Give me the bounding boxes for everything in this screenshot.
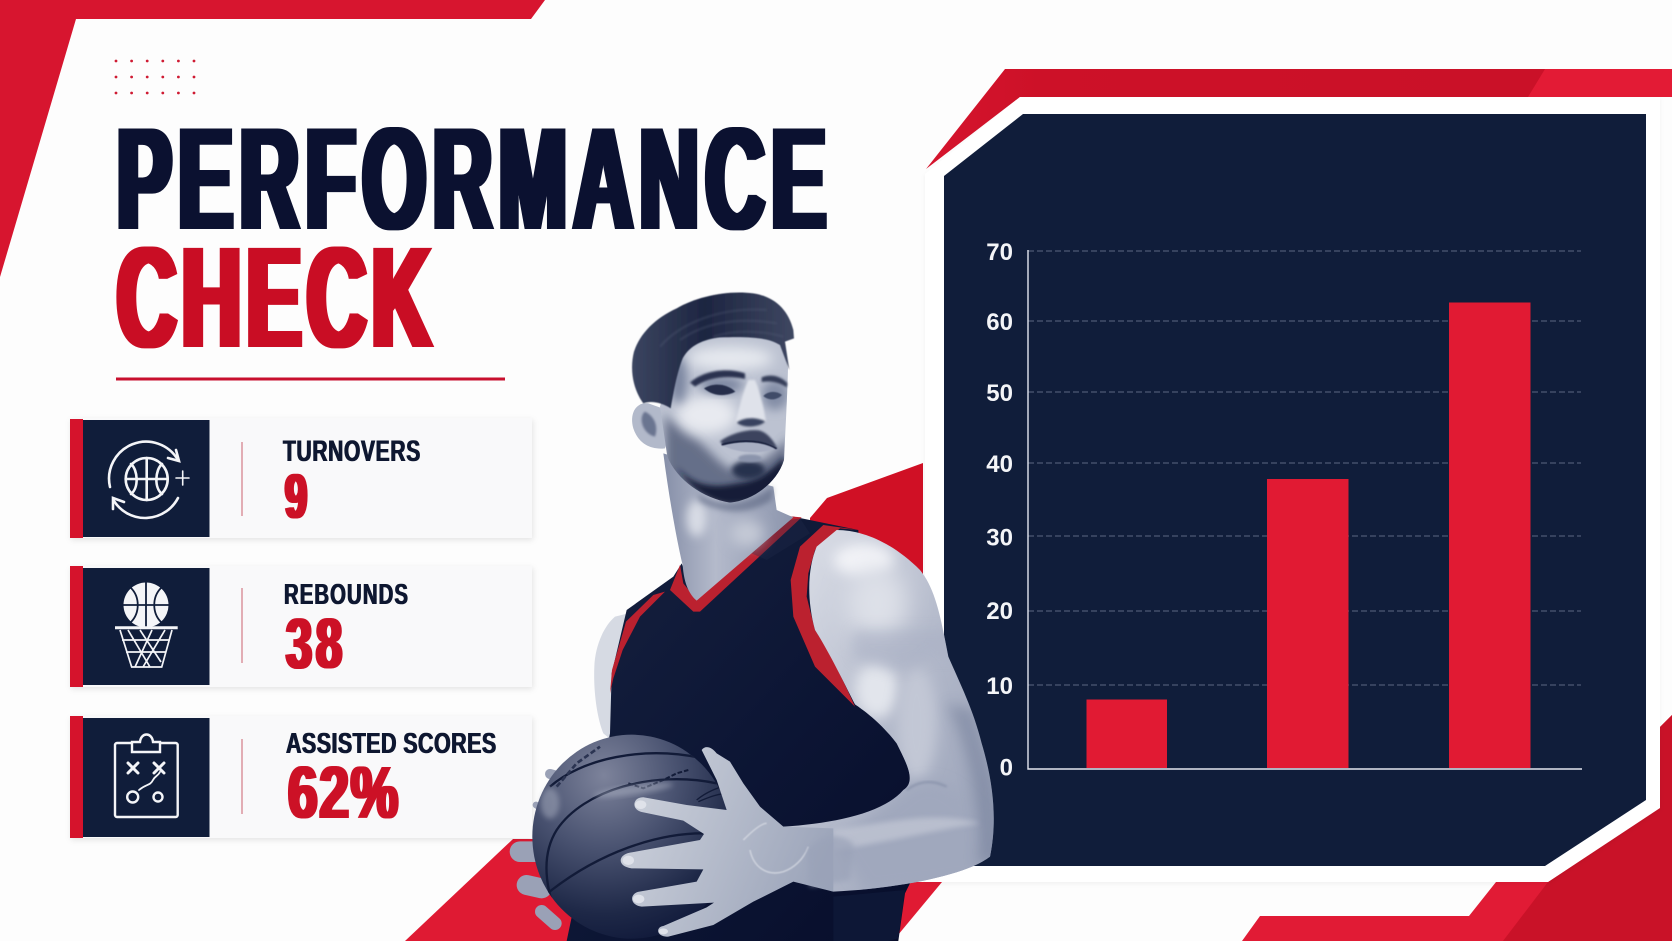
card: turnovers — [70, 418, 532, 538]
face — [660, 330, 788, 503]
knuckle and vein shading — [743, 823, 808, 873]
card background — [70, 716, 532, 838]
bar: turnovers 9 — [1086, 700, 1167, 768]
player far arm — [594, 613, 628, 742]
player neck — [663, 453, 793, 601]
basketball player illustration — [520, 292, 1000, 941]
y-axis labels: 50 — [986, 380, 1013, 407]
ear — [632, 403, 677, 449]
label: ASSISTED SCORES — [286, 728, 496, 760]
card background — [70, 418, 532, 538]
bottom-left red accent — [405, 839, 620, 941]
bar: rebounds 38 — [1267, 479, 1348, 768]
axes — [1028, 250, 1582, 769]
bottom-right red corner shape — [1242, 715, 1672, 941]
icon: ball with circular arrows — [109, 442, 189, 518]
title: CHECK: CHECK — [117, 217, 431, 378]
hand silhouette with fingers — [621, 747, 833, 937]
fingernails — [623, 800, 668, 934]
bar chart — [986, 239, 1582, 782]
divider — [241, 442, 243, 516]
jaw beard — [677, 457, 784, 504]
panel: chart — [925, 97, 1660, 882]
y-axis labels: 30 — [986, 524, 1013, 552]
title: PERFORMANCE: PERFORMANCE — [117, 98, 826, 261]
top-left red corner shape — [0, 0, 545, 277]
decorative dot grid — [115, 60, 195, 94]
card: rebounds — [70, 566, 532, 687]
y-axis labels: 40 — [986, 451, 1013, 478]
value: 62% — [288, 751, 398, 834]
icon: tactics clipboard — [115, 734, 178, 817]
red accent strip — [70, 566, 83, 687]
card: assisted scores — [70, 716, 532, 838]
label: REBOUNDS — [284, 579, 408, 611]
eyes — [704, 385, 735, 395]
red accent strip — [70, 716, 83, 838]
y-axis labels: 70 — [986, 239, 1013, 266]
card background — [70, 566, 532, 687]
panel navy background — [944, 114, 1646, 866]
eyebrows — [690, 370, 745, 387]
divider — [241, 739, 243, 814]
icon tile — [83, 718, 210, 837]
panel white frame — [925, 97, 1660, 882]
hair — [632, 292, 794, 408]
icon tile — [83, 420, 210, 537]
player near arm — [783, 530, 1000, 893]
player head — [632, 292, 794, 510]
mustache — [720, 430, 777, 448]
y-axis labels: 60 — [986, 309, 1013, 336]
lower lip — [724, 442, 775, 452]
divider — [241, 588, 243, 663]
label: TURNOVERS — [283, 436, 420, 468]
title underline — [116, 378, 505, 380]
chin patch — [732, 461, 765, 479]
mouth line — [722, 441, 777, 449]
stubble — [665, 413, 788, 510]
player left hand fingers — [520, 774, 560, 923]
player near hand — [621, 747, 853, 937]
red accent strip — [70, 419, 83, 538]
top-right red band — [926, 69, 1672, 169]
player jersey — [567, 516, 940, 941]
value: 9 — [285, 462, 307, 532]
icon tile — [83, 568, 210, 685]
basketball — [532, 735, 731, 941]
icon: ball above hoop — [115, 582, 178, 667]
y-axis labels: 0 — [1000, 754, 1013, 782]
bar: assisted scores 62 — [1449, 302, 1530, 768]
y-axis labels — [986, 239, 1013, 782]
value: 38 — [286, 604, 342, 683]
y-axis labels: 20 — [986, 598, 1013, 625]
nose — [735, 380, 766, 427]
gridlines — [1028, 251, 1581, 685]
red accent behind shoulder — [810, 463, 923, 600]
y-axis labels: 10 — [986, 673, 1013, 700]
jersey red trim — [610, 516, 858, 707]
red accent behind waist — [880, 882, 942, 941]
